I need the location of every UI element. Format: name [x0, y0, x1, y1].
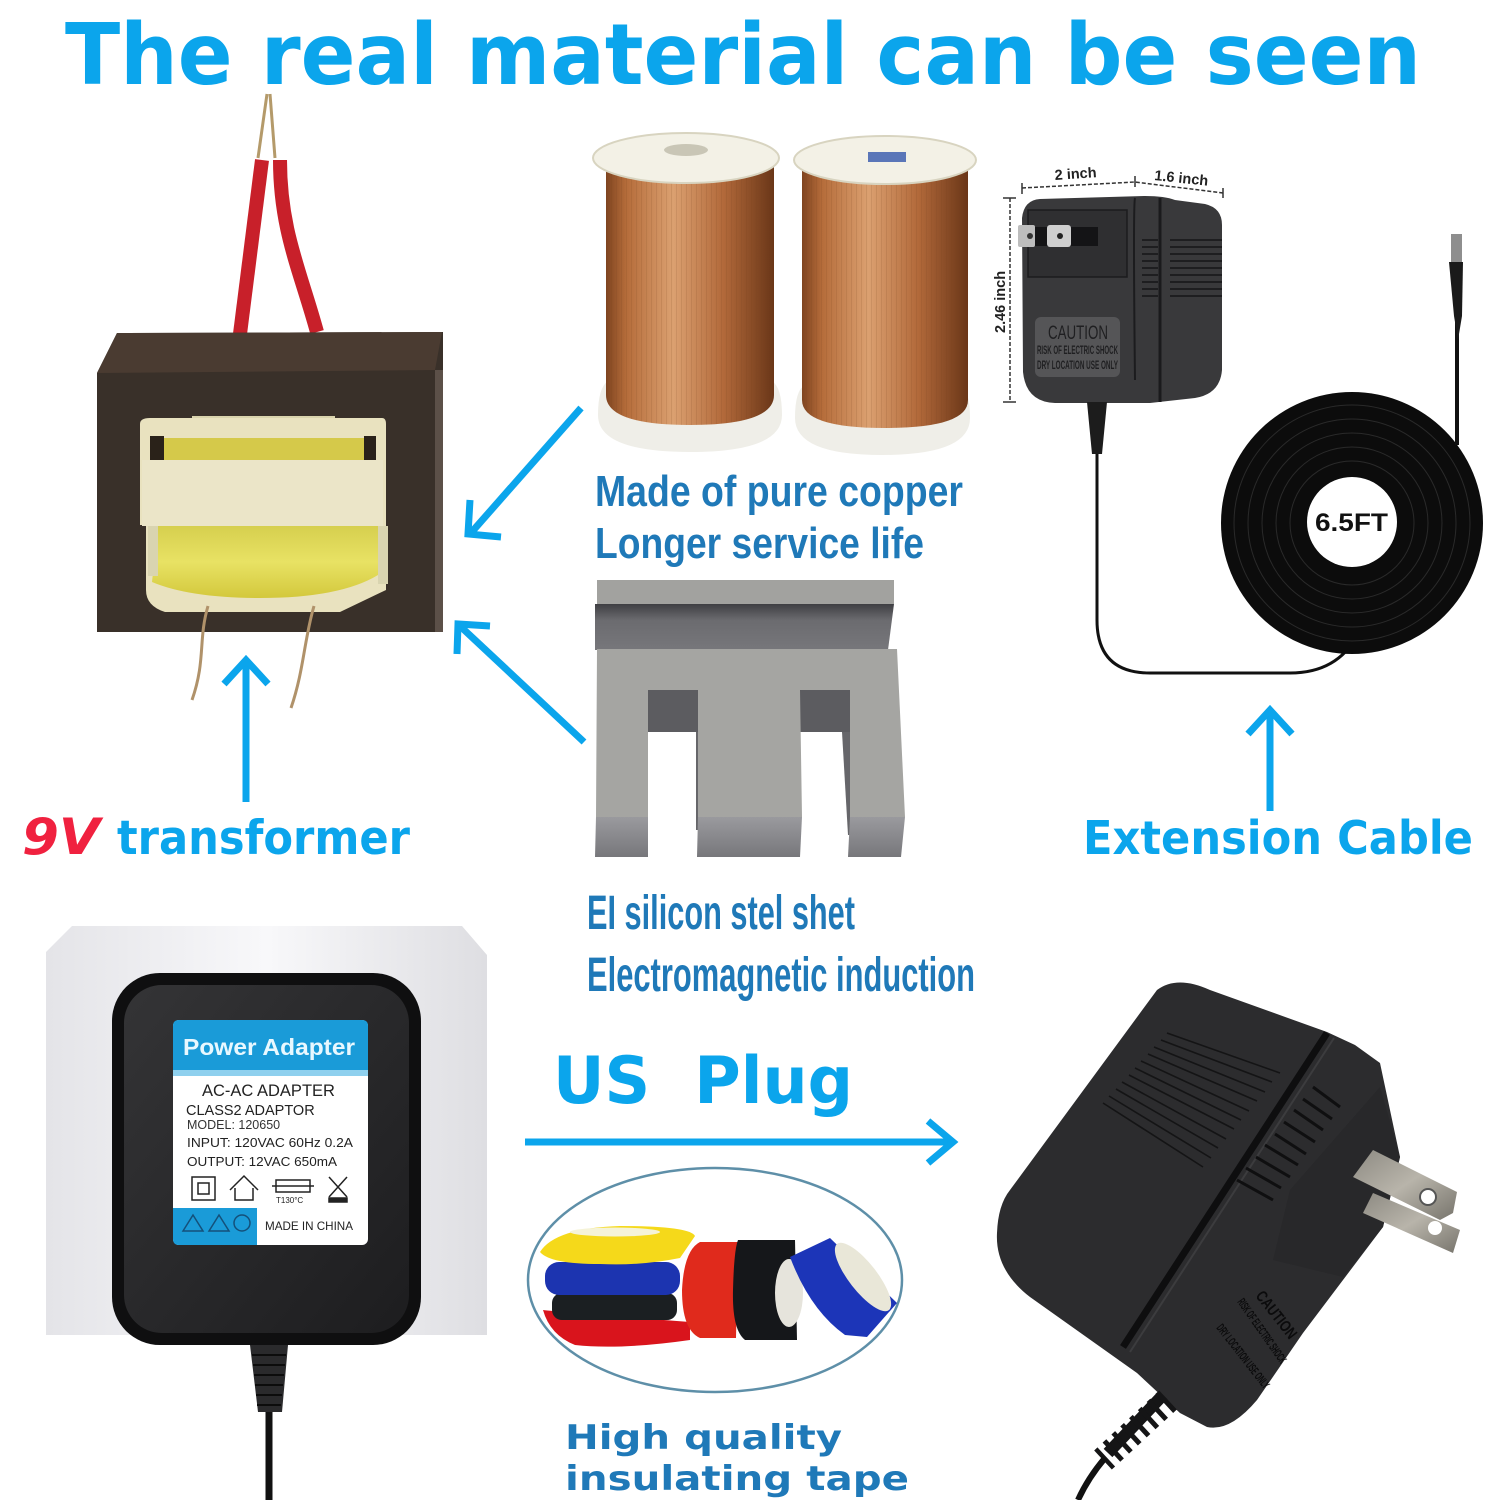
dimension labels: 2 inch	[1054, 165, 1097, 184]
copper caption: Longer service life	[595, 519, 924, 568]
cable end and barrel plug	[1455, 320, 1459, 445]
transformer core	[97, 332, 443, 632]
icon: insulating tape rolls	[528, 1168, 902, 1392]
cable coil	[1221, 392, 1483, 654]
product label: OUTPUT: 12VAC 650mA	[187, 1155, 338, 1169]
product label: INPUT: 120VAC 60Hz 0.2A	[187, 1136, 354, 1150]
arrow: copper to transformer	[468, 408, 581, 537]
steel caption	[587, 887, 975, 1002]
bobbin	[140, 416, 388, 612]
icon: black adapter angled view	[997, 982, 1460, 1500]
strain relief and cord	[1108, 1395, 1163, 1453]
plug blades	[1018, 225, 1098, 247]
product label	[173, 1020, 368, 1245]
title: The real material can be seen	[65, 6, 1421, 105]
red lead wires	[240, 94, 317, 334]
arrow: steel to transformer	[457, 624, 584, 742]
adapter body	[1022, 196, 1222, 403]
product label: AC-AC ADAPTER	[202, 1082, 335, 1100]
icon: adapter plugged into wall plate	[46, 926, 487, 1500]
icon: transformer photo	[97, 94, 443, 708]
label: Extension Cable: Extension Cable	[1083, 811, 1473, 865]
icon: black adapter with dimensions and cable	[993, 165, 1483, 673]
product label: MADE IN CHINA	[265, 1219, 353, 1233]
cable length label: 6.5FT	[1315, 509, 1388, 537]
icon: copper wire spools	[593, 133, 976, 455]
vent ribs	[1237, 1087, 1340, 1200]
dimensions	[1003, 176, 1223, 402]
bottom leads	[192, 606, 314, 708]
embossed caution: DRY LOCATION USE ONLY	[1214, 1321, 1273, 1391]
dimension labels: 2.46 inch	[993, 271, 1009, 333]
product label: Power Adapter	[183, 1034, 355, 1060]
arrow: up to transformer	[224, 660, 268, 802]
plug face	[1273, 1087, 1400, 1277]
label symbols	[183, 1176, 347, 1231]
product label: CLASS2 ADAPTOR	[186, 1103, 315, 1119]
ribs	[1103, 1033, 1280, 1167]
copper caption	[595, 467, 963, 568]
label: 9V transformer	[22, 808, 411, 866]
label: 9V transformer: 9V	[22, 808, 103, 866]
tape caption	[565, 1418, 909, 1499]
label: 9V transformer: transformer	[117, 811, 411, 866]
steel caption: Electromagnetic induction	[587, 949, 975, 1002]
tape caption: insulating tape	[565, 1459, 909, 1499]
cord	[250, 1345, 288, 1412]
embossed caution: RISK OF ELECTRIC SHOCK	[1235, 1296, 1290, 1366]
label: US Plug: US Plug	[553, 1044, 853, 1119]
caution text: RISK OF ELECTRIC SHOCK	[1037, 343, 1118, 357]
embossed caution	[1214, 1288, 1300, 1391]
embossed caution: CAUTION	[1252, 1288, 1300, 1343]
caution text	[1035, 317, 1120, 377]
icon: EI silicon steel sheets	[595, 580, 905, 857]
strain relief and cable	[1087, 402, 1107, 454]
product label: T130°C	[276, 1196, 303, 1205]
product label: MODEL: 120650	[187, 1118, 280, 1132]
caution text: CAUTION	[1048, 323, 1108, 344]
caution text: DRY LOCATION USE ONLY	[1037, 358, 1118, 372]
tape caption: High quality	[565, 1418, 842, 1458]
dimension labels: 1.6 inch	[1154, 168, 1209, 190]
plug blades	[1353, 1150, 1460, 1253]
spool left	[593, 133, 782, 452]
copper caption: Made of pure copper	[595, 467, 963, 516]
steel caption: EI silicon stel shet	[587, 887, 855, 940]
dimension labels	[993, 165, 1209, 333]
arrow: US plug	[525, 1121, 953, 1163]
arrow: up to cable	[1248, 710, 1292, 811]
spool right	[794, 136, 976, 455]
